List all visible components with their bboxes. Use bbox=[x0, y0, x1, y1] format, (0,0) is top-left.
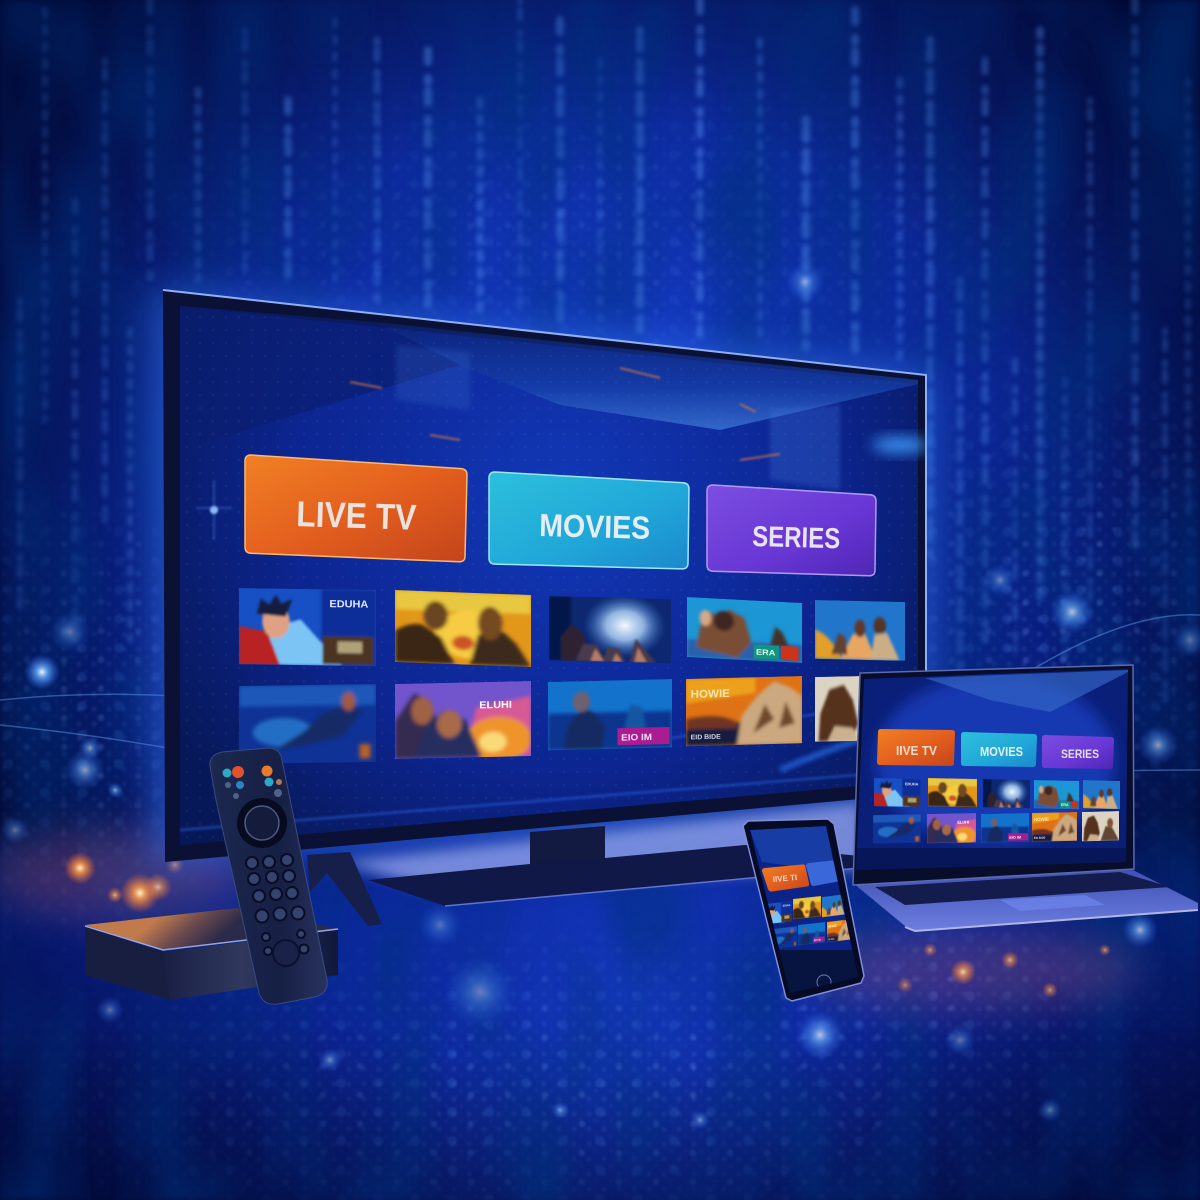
laptop button: SERIES bbox=[1042, 735, 1114, 769]
button: LIVE TV: LIVE TV bbox=[296, 493, 417, 538]
phone screen bbox=[750, 826, 858, 993]
TV back glow bbox=[155, 290, 932, 865]
TV bezel bbox=[163, 290, 926, 862]
button: SERIES: SERIES bbox=[752, 521, 841, 555]
laptop button: MOVIES bbox=[961, 732, 1037, 767]
television bbox=[163, 290, 928, 862]
set-top box bbox=[85, 908, 338, 1000]
laptop button: LIVE TV: IIVE TV bbox=[896, 744, 938, 758]
phone bbox=[740, 815, 870, 1005]
button: MOVIES bbox=[489, 472, 689, 569]
remote control bbox=[210, 748, 327, 1004]
glow on wall under TV bbox=[340, 802, 870, 886]
laptop button: MOVIES: MOVIES bbox=[980, 745, 1023, 759]
TV screen bbox=[180, 306, 928, 845]
data rain columns bbox=[20, 0, 1188, 700]
laptop button: SERIES: SERIES bbox=[1061, 747, 1099, 761]
laptop button: LIVE TV bbox=[877, 729, 955, 766]
button: LIVE TV bbox=[245, 455, 467, 562]
TV stand legs bbox=[307, 852, 382, 926]
TV stand base bbox=[368, 845, 860, 906]
phone screen: IIVE TI bbox=[772, 873, 798, 884]
laptop base bbox=[853, 867, 1198, 931]
laptop screen bbox=[850, 665, 1135, 875]
button: SERIES bbox=[707, 485, 876, 576]
laptop thumbnails bbox=[873, 777, 1120, 845]
laptop lid bbox=[853, 665, 1134, 885]
content thumbnails row 1 bbox=[239, 588, 905, 667]
TV neck bbox=[530, 826, 605, 880]
laptop bbox=[850, 665, 1198, 931]
content thumbnails row 2 bbox=[239, 675, 905, 764]
bokeh lights bbox=[0, 262, 1200, 1130]
button: MOVIES: MOVIES bbox=[539, 507, 651, 546]
